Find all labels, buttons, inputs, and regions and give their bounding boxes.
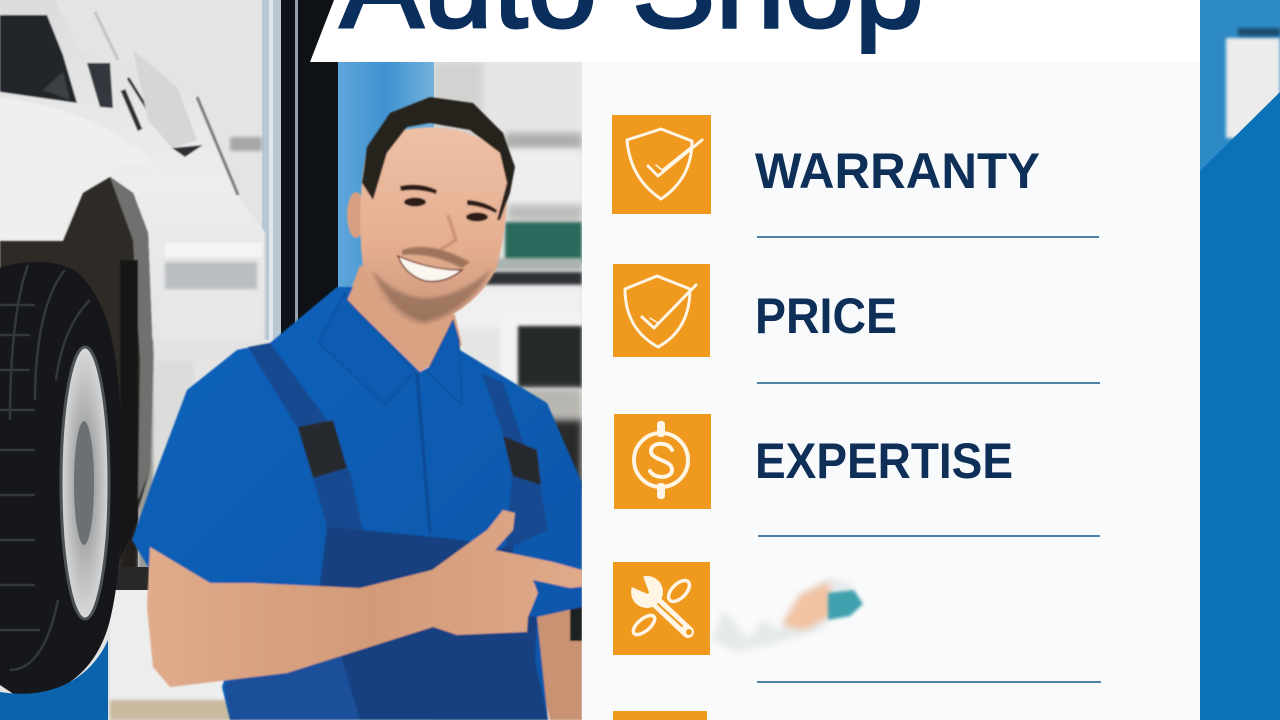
label: price: PRICE xyxy=(755,288,897,344)
divider 1 xyxy=(757,236,1099,238)
mechanic xyxy=(132,97,597,720)
second arm xyxy=(535,607,582,720)
icon: fifth tile (cropped) xyxy=(613,711,707,720)
label: warranty: WARRANTY xyxy=(755,143,1040,199)
watch xyxy=(570,606,582,641)
lift base xyxy=(0,640,108,720)
collar xyxy=(318,293,415,405)
icon: wrench and tools xyxy=(613,562,710,655)
stubble xyxy=(372,268,492,322)
smudged illustration xyxy=(712,578,863,652)
panel: right blue strip xyxy=(1200,0,1280,720)
tire and wheel xyxy=(0,262,123,696)
icon: price shield xyxy=(613,264,710,357)
overall lower side panel xyxy=(225,583,360,720)
hair xyxy=(362,97,515,220)
divider 4 xyxy=(757,681,1101,683)
collar right flap xyxy=(427,320,462,405)
neck xyxy=(347,265,462,372)
car body xyxy=(0,0,265,360)
shirt placket xyxy=(417,373,430,533)
face xyxy=(360,127,507,325)
overall right strap xyxy=(482,373,548,550)
panel: title banner xyxy=(310,0,1200,62)
shirt xyxy=(132,287,582,720)
arm and pointing hand xyxy=(147,510,597,687)
icon: dollar coin xyxy=(614,414,711,509)
left buckle xyxy=(298,420,347,478)
nose shade xyxy=(440,215,456,250)
wheel arch xyxy=(0,177,153,570)
divider 2 xyxy=(757,382,1100,384)
panel: white content panel xyxy=(582,62,1200,720)
smile xyxy=(398,256,462,282)
ear xyxy=(347,192,365,238)
divider 3 xyxy=(758,535,1100,537)
label: expertise: EXPERTISE xyxy=(755,433,1013,489)
overall bib xyxy=(320,527,548,720)
icon: warranty shield xyxy=(612,115,711,214)
panel: workshop photo background xyxy=(0,0,582,720)
right buckle xyxy=(503,436,541,485)
overall left strap xyxy=(248,343,363,583)
mustache shade xyxy=(402,247,470,268)
eyes and brows xyxy=(400,185,497,222)
